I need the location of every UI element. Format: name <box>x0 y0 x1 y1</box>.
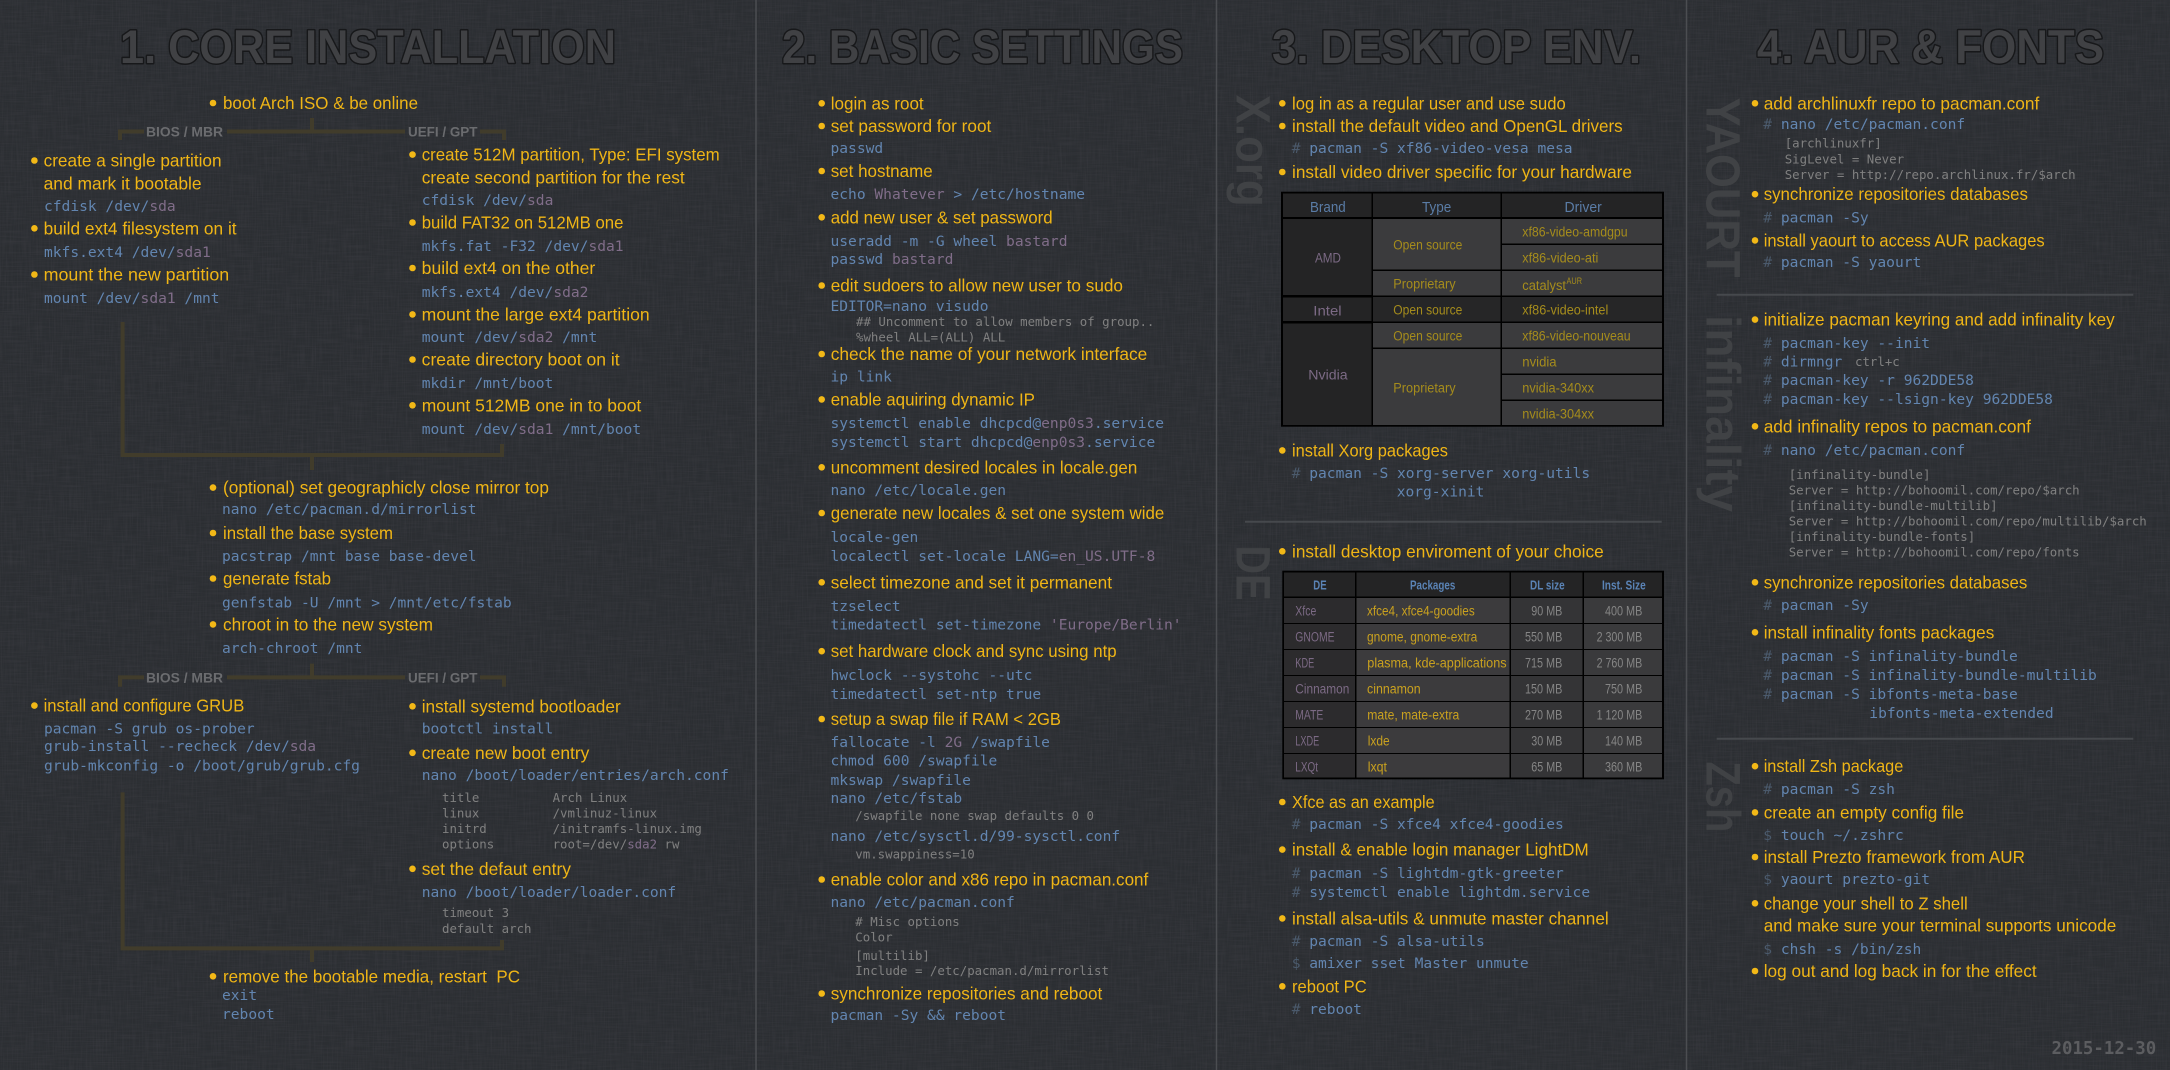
table: video drivers: Proprietary <box>1393 380 1456 396</box>
steps: yaourt: install yaourt to access AUR packages <box>1764 230 2045 250</box>
step list: basic settings: enable aquiring dynamic IP <box>831 389 1035 409</box>
steps: Zsh: $ yaourt prezto-git <box>1763 871 1930 888</box>
table: video drivers: Open source <box>1393 238 1462 252</box>
steps: infinality: # pacman-key -r 962DDE58 <box>1763 372 1974 389</box>
steps: yaourt: synchronize repositories databases <box>1764 184 2028 204</box>
steps: video drivers: install the default video and OpenGL drivers <box>1292 116 1623 136</box>
table: video drivers: Brand <box>1310 200 1346 216</box>
table: video drivers: nvidia-304xx <box>1522 406 1594 422</box>
steps: yaourt: Server = http://repo.archlinux.fr/$arch <box>1785 167 2076 182</box>
table: desktop environments: 270 MB <box>1525 708 1562 722</box>
steps: Xfce, LightDM, audio, reboot: Xfce as an example <box>1292 792 1435 812</box>
branch steps: UEFI partitioning: mount 512MB one in to boot <box>422 395 641 415</box>
date stamp: 2015-12-30 <box>2052 1039 2156 1059</box>
steps: yaourt: [archlinuxfr] <box>1785 136 1882 151</box>
branch steps: systemd boot: /initramfs-linux.img <box>553 821 702 836</box>
branch steps: BIOS partitioning <box>31 150 237 307</box>
steps: base system: genfstab -U /mnt > /mnt/etc/fstab <box>222 594 512 611</box>
steps: Xfce, LightDM, audio, reboot <box>1279 792 1609 1018</box>
steps: Zsh <box>1752 756 2116 981</box>
branch label: UEFI / GPT: UEFI / GPT <box>408 670 478 685</box>
steps: infinality: # pacman -Sy <box>1763 597 1869 614</box>
table: desktop environments: LXDE <box>1295 734 1319 748</box>
steps: infinality: # nano /etc/pacman.conf <box>1763 442 1965 459</box>
branch steps: systemd boot: nano /boot/loader/entries/arch.conf <box>422 767 729 784</box>
branch steps: UEFI partitioning: cfdisk /dev/sda <box>422 192 553 209</box>
steps: infinality: Server = http://bohoomil.com/repo/$arch <box>1789 483 2080 498</box>
table: desktop environments: 65 MB <box>1531 760 1562 774</box>
step list: basic settings <box>818 93 1182 1024</box>
table: video drivers: Open source <box>1393 302 1462 318</box>
branch steps: systemd boot: initrd <box>442 821 487 836</box>
branch steps: systemd boot: timeout 3 <box>442 905 509 920</box>
steps: video drivers: log in as a regular user and use sudo <box>1292 93 1566 113</box>
branch steps: UEFI partitioning: mkfs.fat -F32 /dev/sda1 <box>422 238 624 255</box>
step list: basic settings: passwd bastard <box>830 251 953 268</box>
branch steps: UEFI partitioning: build ext4 on the other <box>422 258 595 278</box>
steps: Xfce, LightDM, audio, reboot: # reboot <box>1292 1001 1362 1018</box>
branch steps: BIOS partitioning: and mark it bootable <box>44 174 202 194</box>
step list: basic settings: setup a swap file if RAM < 2GB <box>831 709 1061 729</box>
branch steps: UEFI partitioning: create 512M partition, Type: EFI system <box>422 145 720 165</box>
step list: basic settings: edit sudoers to allow new user to sudo <box>831 276 1123 296</box>
steps: Xfce, LightDM, audio, reboot: $ amixer sset Master unmute <box>1292 955 1529 972</box>
table: desktop environments: 2 300 MB <box>1597 630 1642 644</box>
steps: infinality: # pacman-key --lsign-key 962DDE58 <box>1763 391 2053 408</box>
panel: 1. core installation <box>31 20 729 1023</box>
step list: basic settings: timedatectl set-timezone 'Europe/Berlin' <box>830 617 1182 634</box>
step list: basic settings: vm.swappiness=10 <box>855 847 975 862</box>
panel: 2. basic settings <box>782 20 1183 1024</box>
step: install Xorg packages <box>1279 440 1590 501</box>
steps: base system: chroot in to the new system <box>223 614 433 634</box>
branch label: UEFI / GPT: UEFI / GPT <box>408 124 478 140</box>
step: restart: remove the bootable media, restart PC <box>223 966 520 986</box>
steps: Zsh: change your shell to Z shell <box>1764 893 1968 913</box>
steps: base system: nano /etc/pacman.d/mirrorlist <box>222 501 477 518</box>
table: video drivers: Type <box>1422 200 1451 216</box>
branch steps: systemd boot: root=/dev/sda2 rw <box>553 837 680 852</box>
step list: basic settings: pacman -Sy && reboot <box>830 1007 1006 1024</box>
branch steps: systemd boot: title <box>442 790 479 805</box>
steps: video drivers: install video driver specific for your hardware <box>1292 162 1632 182</box>
table: video drivers: xf86-video-amdgpu <box>1522 224 1628 240</box>
table: desktop environments: 360 MB <box>1605 760 1642 774</box>
table: desktop environments: mate, mate-extra <box>1367 708 1460 722</box>
step list: basic settings: fallocate -l 2G /swapfile <box>830 734 1050 751</box>
step: boot Arch ISO: boot Arch ISO & be online <box>223 93 418 113</box>
branch label: BIOS / MBR: BIOS / MBR <box>146 124 223 140</box>
table: desktop environments: cinnamon <box>1367 682 1421 696</box>
step list: basic settings: ip link <box>830 369 892 386</box>
branch steps: systemd boot: options <box>442 837 494 852</box>
step: restart: exit <box>222 987 257 1004</box>
flow connector: merge branches <box>123 322 502 470</box>
title: basic settings: 2. BASIC SETTINGS <box>782 20 1183 73</box>
table: video drivers: AUR <box>1566 276 1582 286</box>
table: desktop environments: lxqt <box>1368 760 1387 774</box>
steps: infinality: # pacman -S infinality-bundle-multilib <box>1763 667 2097 684</box>
steps: yaourt: # pacman -Sy <box>1763 209 1869 226</box>
branch steps: GRUB: pacman -S grub os-prober <box>44 720 255 737</box>
steps: Zsh: log out and log back in for the effect <box>1764 961 2037 981</box>
table: desktop environments: LXQt <box>1295 760 1318 774</box>
step list: basic settings: add new user & set password <box>831 207 1053 227</box>
step list: basic settings: enable color and x86 repo in pacman.conf <box>831 870 1148 890</box>
steps: infinality: # pacman -S infinality-bundle <box>1763 648 2018 665</box>
steps: Zsh: $ touch ~/.zshrc <box>1763 827 1904 844</box>
step list: basic settings: EDITOR=nano visudo <box>830 298 988 315</box>
step list: basic settings: nano /etc/fstab <box>830 790 962 807</box>
steps: infinality: [infinality-bundle] <box>1789 467 1930 482</box>
step list: basic settings: nano /etc/sysctl.d/99-sysctl.conf <box>830 828 1120 845</box>
table: desktop environments: Packages <box>1410 578 1455 592</box>
step list: basic settings: Color <box>855 930 893 945</box>
table: video drivers: Nvidia <box>1308 366 1348 382</box>
table: desktop environments: xfce4, xfce4-goodies <box>1367 604 1475 618</box>
branch steps: GRUB: grub-mkconfig -o /boot/grub/grub.cfg <box>44 758 360 774</box>
step list: basic settings: nano /etc/locale.gen <box>830 482 1006 499</box>
steps: Xfce, LightDM, audio, reboot: install & enable login manager LightDM <box>1292 840 1589 860</box>
step list: basic settings: synchronize repositories and reboot <box>831 984 1102 1004</box>
branch steps: BIOS partitioning: mount the new partition <box>44 264 229 284</box>
title: AUR and fonts: 4. AUR & FONTS <box>1757 20 2104 73</box>
step list: basic settings: nano /etc/pacman.conf <box>830 894 1015 911</box>
table: desktop environments: 30 MB <box>1531 734 1562 748</box>
steps: infinality: # pacman -S ibfonts-meta-base <box>1763 686 2018 703</box>
steps: Xfce, LightDM, audio, reboot: install alsa-utils & unmute master channel <box>1292 908 1609 928</box>
table: desktop environments <box>1282 571 1664 779</box>
section watermark: Zsh: Zsh <box>1696 761 1749 832</box>
branch steps: UEFI partitioning: build FAT32 on 512MB one <box>422 212 623 232</box>
table: desktop environments: DL size <box>1530 578 1565 592</box>
panel: 3. desktop environment <box>1226 20 1664 1018</box>
step list: basic settings: useradd -m -G wheel bastard <box>830 233 1067 250</box>
step list: basic settings: set password for root <box>831 116 991 136</box>
steps: infinality: Server = http://bohoomil.com/repo/multilib/$arch <box>1789 514 2147 529</box>
step list: basic settings: /swapfile none swap defaults 0 0 <box>855 808 1094 823</box>
title: desktop env: 3. DESKTOP ENV. <box>1272 20 1641 73</box>
step list: basic settings: generate new locales & set one system wide <box>831 503 1164 523</box>
table: desktop environments: Xfce <box>1295 604 1316 618</box>
steps: video drivers: # pacman -S xf86-video-vesa mesa <box>1292 140 1573 157</box>
steps: Xfce, LightDM, audio, reboot: # pacman -S alsa-utils <box>1292 933 1485 950</box>
steps: infinality: synchronize repositories databases <box>1764 572 2028 592</box>
step list: basic settings: check the name of your network interface <box>831 344 1147 364</box>
steps: Xfce, LightDM, audio, reboot: # systemctl enable lightdm.service <box>1292 884 1590 901</box>
steps: Zsh: # pacman -S zsh <box>1763 781 1895 798</box>
step list: basic settings: timedatectl set-ntp true <box>830 686 1041 703</box>
steps: infinality: install infinality fonts packages <box>1764 622 1995 642</box>
steps: Zsh: create an empty config file <box>1764 802 1964 822</box>
branch steps: UEFI partitioning: create directory boot on it <box>422 350 620 370</box>
step: install Xorg packages: # pacman -S xorg-server xorg-utils <box>1292 465 1590 482</box>
steps: infinality <box>1752 310 2147 722</box>
step list: basic settings: systemctl enable dhcpcd@enp0s3.service <box>830 415 1164 432</box>
table: desktop environments: 90 MB <box>1531 604 1562 618</box>
steps: yaourt: # pacman -S yaourt <box>1763 254 1921 271</box>
branch steps: GRUB: install and configure GRUB <box>44 696 244 716</box>
branch steps: BIOS partitioning: cfdisk /dev/sda <box>44 198 176 215</box>
branch steps: systemd boot: set the defaut entry <box>422 859 571 879</box>
steps: base system: install the base system <box>223 523 393 543</box>
steps: yaourt <box>1752 93 2076 271</box>
step list: basic settings: # Misc options <box>855 914 960 929</box>
branch steps: systemd boot: /vmlinuz-linux <box>553 806 657 821</box>
section watermark: YAOURT: YAOURT <box>1696 98 1749 278</box>
steps: Zsh: install Zsh package <box>1764 756 1903 776</box>
steps: base system: (optional) set geographicly close mirror top <box>223 478 549 498</box>
branch steps: systemd boot: bootctl install <box>422 721 553 738</box>
step list: basic settings: passwd <box>830 140 883 157</box>
branch steps: systemd boot: install systemd bootloader <box>422 696 621 716</box>
step list: basic settings: ## Uncomment to allow members of group.. <box>856 314 1154 329</box>
steps: infinality: add infinality repos to pacman.conf <box>1764 416 2031 436</box>
table: desktop environments: 750 MB <box>1605 682 1642 696</box>
table: video drivers: Open source <box>1393 328 1462 344</box>
branch steps: BIOS partitioning: mkfs.ext4 /dev/sda1 <box>44 244 211 261</box>
step list: basic settings: set hardware clock and sync using ntp <box>831 641 1117 661</box>
steps: infinality: Server = http://bohoomil.com/repo/fonts <box>1789 545 2080 560</box>
step list: basic settings: uncomment desired locales in locale.gen <box>831 457 1137 477</box>
steps: yaourt: SigLevel = Never <box>1785 151 1904 166</box>
step list: basic settings: Include = /etc/pacman.d/mirrorlist <box>855 963 1109 978</box>
step list: basic settings: set hostname <box>831 161 933 181</box>
steps: yaourt: # nano /etc/pacman.conf <box>1763 116 1965 133</box>
steps: base system <box>210 478 549 657</box>
steps: infinality: # dirmngr <box>1763 354 1843 371</box>
steps: base system: pacstrap /mnt base base-devel <box>222 548 477 565</box>
table: video drivers: Driver <box>1564 200 1602 216</box>
table: desktop environments: plasma, kde-applications <box>1367 656 1507 670</box>
branch steps: systemd boot: default arch <box>442 921 532 936</box>
branch steps: BIOS partitioning: create a single partition <box>44 150 222 170</box>
steps: infinality: [infinality-bundle-fonts] <box>1789 529 1975 544</box>
branch steps: UEFI partitioning: mkfs.ext4 /dev/sda2 <box>422 284 588 301</box>
steps: Zsh: install Prezto framework from AUR <box>1764 847 2025 867</box>
step list: basic settings: echo Whatever > /etc/hostname <box>830 186 1085 203</box>
steps: base system: arch-chroot /mnt <box>222 640 362 657</box>
section watermark: DE: DE <box>1226 546 1279 600</box>
branch steps: BIOS partitioning: build ext4 filesystem on it <box>44 218 237 238</box>
steps: video drivers <box>1279 93 1632 182</box>
branch steps: systemd boot <box>409 696 729 936</box>
table: video drivers: Intel <box>1313 302 1342 318</box>
steps: infinality: ibfonts-meta-extended <box>1869 705 2054 722</box>
branch steps: UEFI partitioning: create second partition for the rest <box>422 167 685 187</box>
panel: 4. AUR and fonts <box>1696 20 2156 1059</box>
flow connector: split into BIOS and UEFI <box>120 118 504 140</box>
branch steps: UEFI partitioning <box>409 145 720 438</box>
table: desktop environments: 2 760 MB <box>1597 656 1642 670</box>
steps: infinality: # pacman-key --init <box>1763 335 1930 352</box>
step: install Xorg packages: install Xorg packages <box>1292 440 1448 460</box>
table: video drivers: xf86-video-ati <box>1522 250 1598 266</box>
branch steps: systemd boot: create new boot entry <box>422 743 590 763</box>
table: video drivers: Proprietary <box>1393 276 1456 292</box>
table: video drivers: xf86-video-intel <box>1522 302 1608 318</box>
title: core installation: 1. CORE INSTALLATION <box>120 20 616 73</box>
table: desktop environments: lxde <box>1368 734 1390 748</box>
step list: basic settings: [multilib] <box>855 948 930 963</box>
step list: basic settings: login as root <box>831 93 924 113</box>
branch steps: GRUB <box>31 696 360 774</box>
table: desktop environments: 400 MB <box>1605 604 1642 618</box>
table: desktop environments: KDE <box>1295 656 1314 670</box>
steps: Xfce, LightDM, audio, reboot: # pacman -S xfce4 xfce4-goodies <box>1292 816 1564 833</box>
flow connector: merge bootloader options <box>123 792 502 962</box>
table: video drivers: nvidia-340xx <box>1522 380 1594 396</box>
branch label: BIOS / MBR: BIOS / MBR <box>146 670 223 685</box>
branch steps: UEFI partitioning: mkdir /mnt/boot <box>422 375 553 392</box>
branch steps: UEFI partitioning: mount /dev/sda2 /mnt <box>422 329 597 346</box>
branch steps: UEFI partitioning: mount the large ext4 partition <box>422 304 650 324</box>
steps: infinality: initialize pacman keyring and add infinality key <box>1764 310 2115 330</box>
step list: basic settings: select timezone and set it permanent <box>831 572 1112 592</box>
step list: basic settings: systemctl start dhcpcd@enp0s3.service <box>830 434 1155 451</box>
step: install Xorg packages: xorg-xinit <box>1397 484 1484 501</box>
steps: base system: generate fstab <box>223 568 331 588</box>
step list: basic settings: tzselect <box>830 598 901 615</box>
table: video drivers: catalyst <box>1522 278 1566 293</box>
table: video drivers <box>1281 192 1664 427</box>
steps: Zsh: and make sure your terminal supports unicode <box>1764 915 2116 935</box>
table: desktop environments: DE <box>1313 578 1327 592</box>
branch steps: systemd boot: nano /boot/loader/loader.conf <box>422 884 676 901</box>
steps: infinality: ctrl+c <box>1855 354 1900 369</box>
table: desktop environments: Inst. Size <box>1602 578 1646 592</box>
table: desktop environments: 140 MB <box>1605 734 1642 748</box>
step list: basic settings: %wheel ALL=(ALL) ALL <box>856 330 1005 344</box>
step list: basic settings: chmod 600 /swapfile <box>830 753 997 770</box>
step: restart <box>210 966 520 1023</box>
flow connector: split bootloader options <box>120 664 504 687</box>
table: desktop environments: gnome, gnome-extra <box>1367 630 1478 644</box>
table: desktop environments: 1 120 MB <box>1597 708 1642 722</box>
steps: Xfce, LightDM, audio, reboot: reboot PC <box>1292 976 1367 996</box>
branch steps: UEFI partitioning: mount /dev/sda1 /mnt/boot <box>422 421 641 438</box>
steps: Xfce, LightDM, audio, reboot: # pacman -S lightdm-gtk-greeter <box>1292 865 1564 882</box>
branch steps: systemd boot: Arch Linux <box>553 790 627 805</box>
step list: basic settings: locale-gen <box>830 529 918 546</box>
step: restart: reboot <box>222 1006 275 1023</box>
table: video drivers: xf86-video-nouveau <box>1522 328 1631 344</box>
table: desktop environments: 715 MB <box>1525 656 1562 670</box>
table: desktop environments: GNOME <box>1295 630 1335 644</box>
table: desktop environments: Cinnamon <box>1295 682 1349 696</box>
section watermark: X.org: X.org <box>1226 95 1279 207</box>
step list: basic settings: mkswap /swapfile <box>830 772 971 789</box>
steps: yaourt: add archlinuxfr repo to pacman.conf <box>1764 93 2039 113</box>
table: desktop environments: 150 MB <box>1525 682 1562 696</box>
steps: infinality: [infinality-bundle-multilib] <box>1789 498 1998 513</box>
branch steps: BIOS partitioning: mount /dev/sda1 /mnt <box>44 290 220 307</box>
section watermark: infinality: infinality <box>1696 315 1749 512</box>
table: desktop environments: MATE <box>1295 708 1323 722</box>
step list: basic settings: hwclock --systohc --utc <box>830 667 1032 684</box>
steps: Zsh: $ chsh -s /bin/zsh <box>1763 941 1921 958</box>
step: choose desktop environment: install desktop enviroment of your choice <box>1292 541 1604 561</box>
table: video drivers: nvidia <box>1522 354 1557 370</box>
table: desktop environments: 550 MB <box>1525 630 1562 644</box>
step list: basic settings: localectl set-locale LANG=en_US.UTF-8 <box>830 548 1155 565</box>
branch steps: systemd boot: linux <box>442 806 479 821</box>
branch steps: GRUB: grub-install --recheck /dev/sda <box>44 738 316 755</box>
table: video drivers: AMD <box>1315 250 1341 266</box>
